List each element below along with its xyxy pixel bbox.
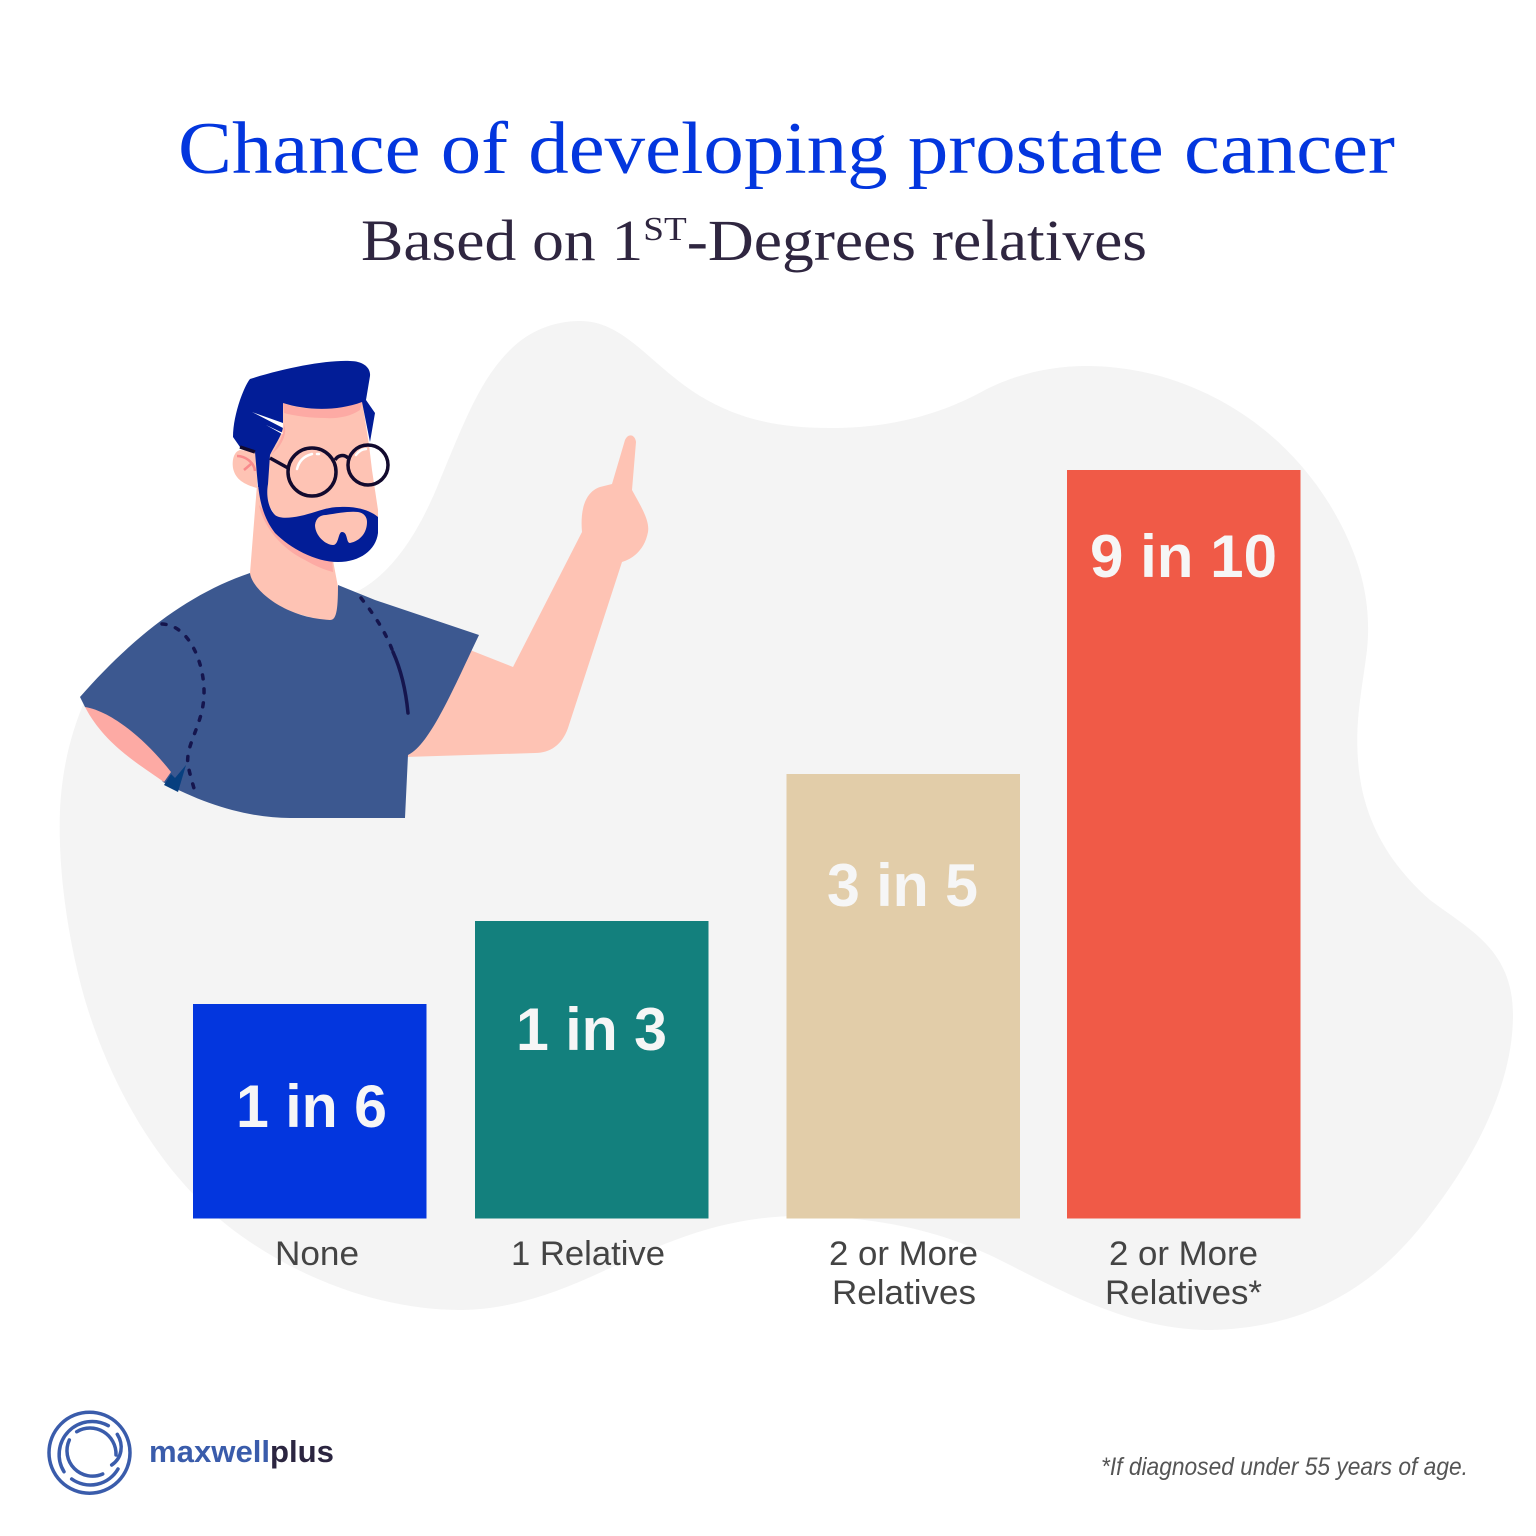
value: 1 in 6 — [236, 1073, 387, 1140]
neck — [248, 485, 338, 625]
ear — [233, 450, 258, 488]
glasses — [240, 445, 388, 496]
forearm shadow — [85, 707, 171, 782]
bridge and temple — [240, 447, 348, 468]
temple shadow — [271, 424, 285, 455]
label: none: None — [275, 1235, 359, 1273]
label: 1 relative: 1 Relative — [511, 1235, 665, 1273]
left lens — [288, 448, 336, 496]
bar: 2 or more relatives under 55 — [1067, 470, 1300, 1218]
logo — [49, 1412, 334, 1493]
subtitle: ST — [643, 211, 687, 248]
footnote: *If diagnosed under 55 years of age. — [1101, 1453, 1468, 1481]
right lens — [348, 445, 388, 485]
face — [265, 400, 378, 550]
bar: 1 relative — [475, 921, 708, 1218]
label: 2 or more relatives with footnote — [1105, 1235, 1262, 1312]
logo mark: concentric rings — [49, 1412, 130, 1493]
bar: none — [193, 1004, 426, 1218]
label: 2 or more relatives with footnote: 2 or More — [1109, 1235, 1258, 1273]
logo wordmark: maxwellplus — [149, 1434, 334, 1469]
value: 1 in 3 — [516, 996, 667, 1063]
shirt stitching right — [361, 598, 393, 652]
subtitle: Based on 1 — [361, 208, 619, 273]
hair — [233, 361, 375, 487]
value: 3 in 5 — [827, 852, 978, 919]
label: 2 or more relatives — [829, 1235, 978, 1312]
value: 9 in 10 — [1090, 523, 1277, 590]
sleeve fold — [164, 765, 186, 792]
background blob — [60, 321, 1513, 1330]
label: 2 or more relatives: 2 or More — [829, 1235, 978, 1273]
forehead shadow — [283, 402, 362, 418]
shirt seam right — [393, 652, 408, 713]
shirt — [80, 573, 479, 818]
goatee skin — [315, 512, 367, 545]
title: Chance of developing prostate cancer — [178, 108, 1395, 190]
lens reflections — [297, 449, 366, 469]
hair highlights — [252, 412, 283, 434]
bar: 2 or more relatives — [786, 774, 1020, 1218]
ear detail — [237, 456, 255, 471]
arm and hand — [405, 435, 648, 757]
neck shadow — [259, 505, 333, 572]
label: 2 or more relatives with footnote: Relatives* — [1105, 1274, 1262, 1312]
illustration: man pointing — [80, 361, 648, 818]
label: 2 or more relatives: Relatives — [832, 1274, 976, 1312]
beard — [258, 484, 378, 562]
subtitle: -Degrees relatives — [687, 208, 1147, 273]
shirt stitching left — [162, 624, 204, 795]
